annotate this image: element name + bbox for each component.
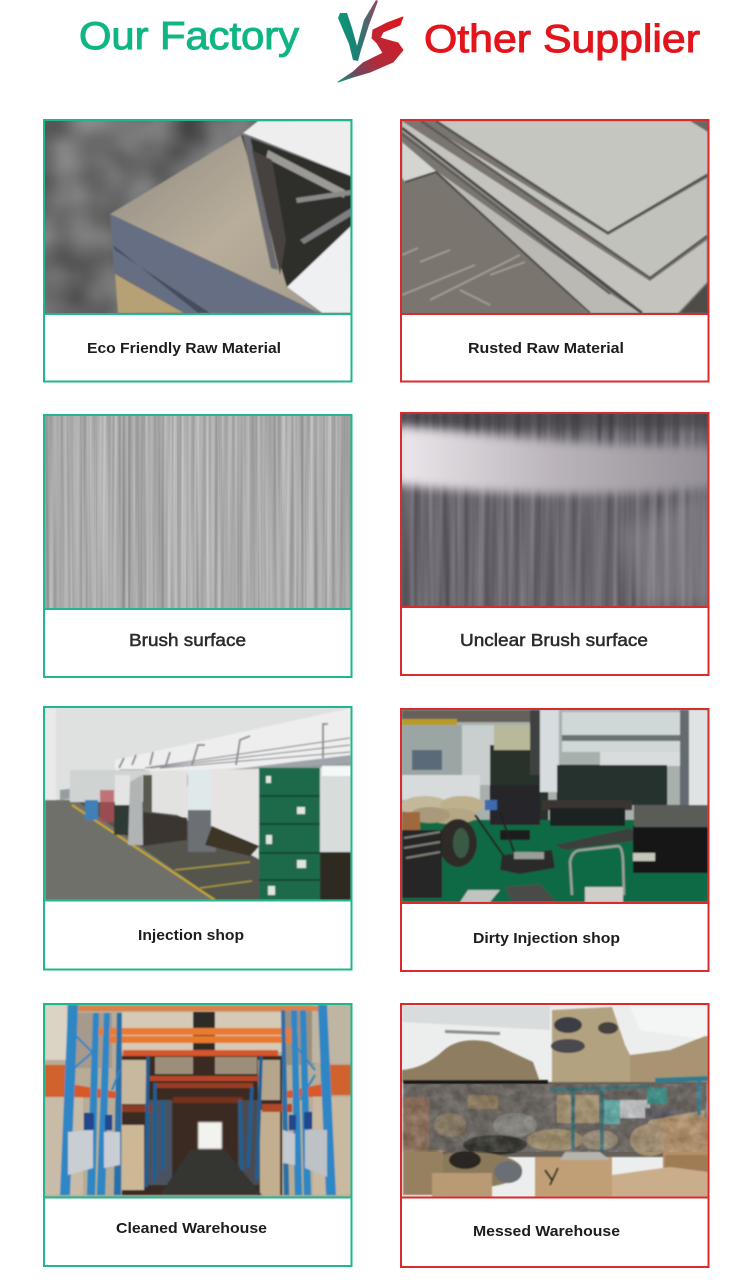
label: Brush surface [129,630,246,650]
photo: dull metal with light band [395,405,715,606]
photo: messy warehouse piles [402,1005,708,1197]
panel frame [401,1004,708,1267]
panel frame [44,120,352,382]
label: Eco Friendly Raw Material [87,340,281,357]
photo: stainless steel sheet stack [45,121,351,313]
photo: brushed metal texture [45,416,351,608]
label: Dirty Injection shop [473,930,620,947]
panel frame [44,1004,352,1266]
icon: VS brush logo [338,0,403,82]
panel frame [44,415,352,677]
panel: unclear brush surface [395,405,715,675]
panel: brush surface [44,415,352,677]
photo: rusted steel plates [402,121,708,313]
heading: Our Factory: Our Factory [79,15,300,58]
panel frame [401,120,708,382]
photo: clean injection workshop [45,708,351,900]
panel: cleaned warehouse [44,1004,352,1266]
panel frame [401,413,708,675]
panel: rusted raw material [401,120,708,382]
label: Injection shop [138,927,244,944]
photo: orderly warehouse racks [45,1005,351,1197]
photo: cluttered injection workshop [401,710,708,902]
label: Unclear Brush surface [460,630,648,650]
panel frame [44,707,352,970]
panel frame [401,709,708,971]
label: Cleaned Warehouse [116,1220,267,1237]
panel: injection shop [44,707,352,970]
panel: dirty injection shop [401,709,708,971]
heading: Other Supplier: Other Supplier [424,18,700,61]
label: Messed Warehouse [473,1223,620,1240]
panel: messed warehouse [401,1004,708,1267]
panel: eco friendly raw material [44,120,352,382]
label: Rusted Raw Material [468,340,624,357]
